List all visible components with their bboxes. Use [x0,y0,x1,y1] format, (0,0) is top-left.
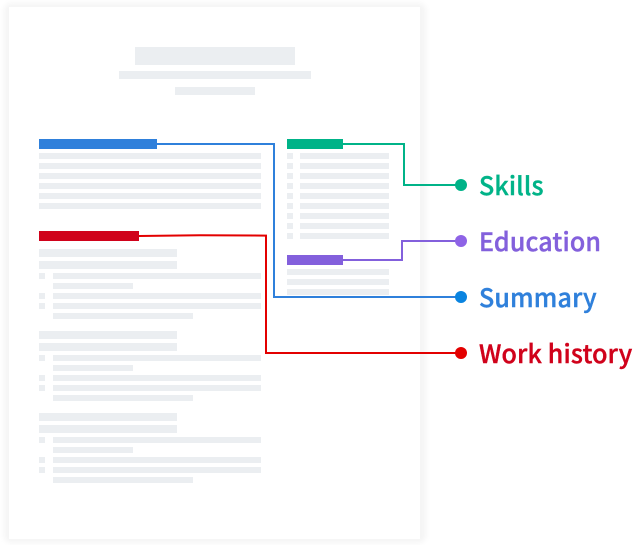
label: education: Education [479,223,601,259]
panel: resume page [4,3,426,543]
resume header placeholder [119,47,311,95]
icon: work history dot [455,347,467,359]
connector: summary [157,144,461,297]
icon: education dot [455,235,467,247]
label: skills: Skills [479,167,544,203]
icon: summary dot [455,291,467,303]
connector: education [343,241,461,260]
work history section [39,231,261,483]
skills section [287,139,389,239]
icon: skills dot [455,179,467,191]
label: work history: Work history [479,335,633,371]
connector: skills [343,144,461,185]
label: summary: Summary [479,279,597,315]
education section [287,255,389,295]
summary section [39,139,261,209]
connector: work history [139,235,461,353]
